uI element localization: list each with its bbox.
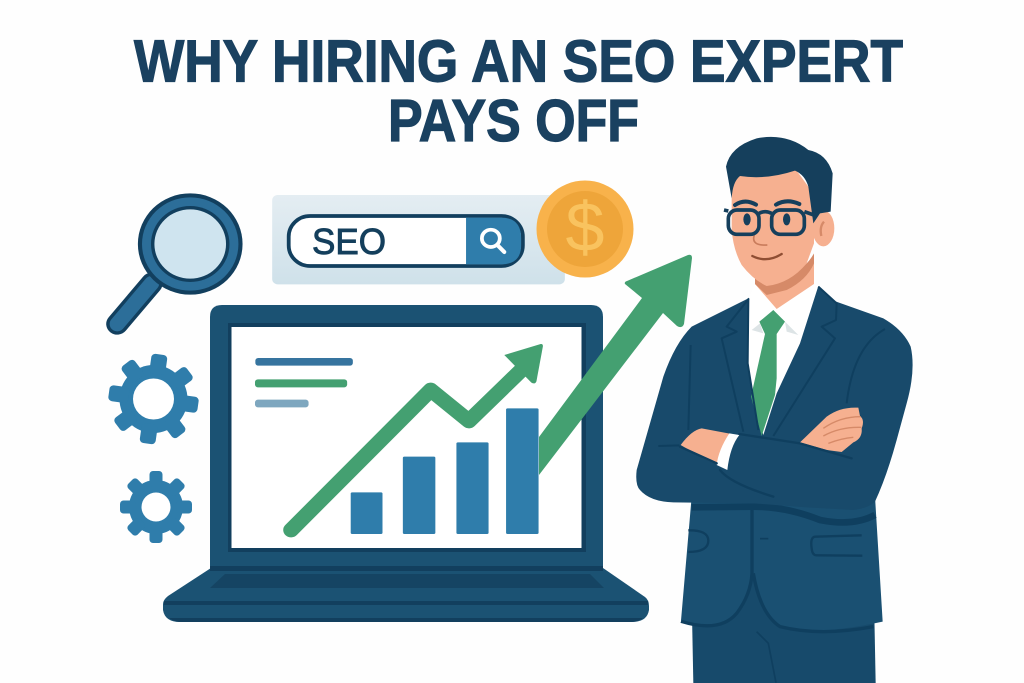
glasses xyxy=(724,210,817,234)
lapel lines xyxy=(658,287,885,446)
left hand and cuff xyxy=(681,428,739,470)
shirt xyxy=(748,283,818,435)
jacket lower xyxy=(681,497,883,632)
collar shadow xyxy=(752,322,798,335)
icon: magnifying glass xyxy=(117,193,243,324)
tie xyxy=(751,310,785,436)
title: PAYS OFF xyxy=(388,88,639,154)
arm fold lines xyxy=(680,434,852,497)
keyboard detail xyxy=(164,566,648,622)
head xyxy=(726,137,834,286)
search text: SEO: SEO xyxy=(312,221,386,262)
title: WHY HIRING AN SEO EXPERT xyxy=(134,28,903,94)
businessman xyxy=(636,137,913,683)
chart: growth line with arrow xyxy=(291,344,543,530)
icon: small gear xyxy=(120,471,192,543)
laptop base xyxy=(163,568,649,622)
trousers xyxy=(691,563,876,683)
icon: large gear xyxy=(108,353,199,445)
jacket upper and arms xyxy=(636,286,913,510)
chart: text lines xyxy=(255,358,353,407)
title xyxy=(134,28,903,154)
laptop screen xyxy=(228,323,586,552)
chart: bars xyxy=(351,408,539,534)
panel: search bar xyxy=(272,195,565,284)
neck xyxy=(755,263,814,309)
laptop xyxy=(163,305,649,622)
icon: dollar coin xyxy=(536,180,634,278)
neck shadow xyxy=(755,253,814,295)
right hand xyxy=(800,408,863,452)
icon: dollar coin: $ xyxy=(566,188,604,266)
arrow: large green growth arrow xyxy=(539,255,692,475)
laptop lid xyxy=(210,305,603,570)
